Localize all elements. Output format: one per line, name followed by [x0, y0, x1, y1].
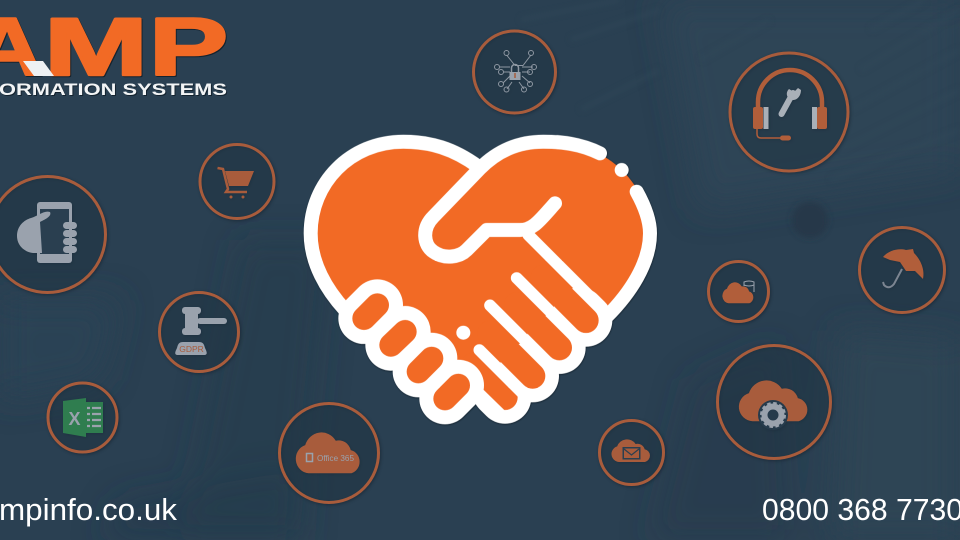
- office logo mark: [306, 454, 312, 462]
- gavel glyph: [175, 307, 227, 355]
- ring: [860, 228, 944, 312]
- circuit lock glyph: [494, 50, 536, 92]
- icon: Office 365 cloud: [280, 404, 378, 502]
- icon: phone in hand: [0, 176, 106, 292]
- logo wordmark AMP: P: [149, 2, 228, 93]
- ring: [708, 262, 768, 322]
- Office 365 label: Office 365: [317, 453, 354, 463]
- icon: cloud with gear: [718, 346, 830, 458]
- ring: [718, 346, 830, 458]
- icon: cloud with envelope: [600, 420, 664, 484]
- heart body: [311, 142, 650, 407]
- website address: mpinfo.co.uk: [0, 492, 177, 527]
- logo wordmark AMP: [0, 2, 228, 93]
- logo wordmark AMP: M: [44, 2, 148, 93]
- wrist edge of lowest finger: [480, 393, 503, 416]
- cart glyph: [218, 168, 254, 198]
- finger separator lines: [479, 235, 602, 394]
- ring: [474, 31, 556, 113]
- cloud bucket glyph: [722, 281, 754, 303]
- ring: [730, 53, 848, 171]
- icon: network security: [474, 31, 556, 113]
- icon: umbrella: [860, 228, 944, 312]
- heart outline left lobe: [311, 142, 478, 310]
- logo tagline: ORMATION SYSTEMS: [0, 81, 227, 99]
- icon: Excel: [48, 383, 117, 452]
- cloud mail glyph: [611, 439, 650, 462]
- icon: shopping cart: [200, 144, 274, 218]
- icon: headset with wrench: [730, 53, 848, 171]
- ring: [48, 383, 117, 452]
- logo white stripe: [23, 61, 54, 76]
- highlight dots: [456, 163, 629, 340]
- icon: small cloud with bucket: [708, 262, 768, 322]
- cloud shape: [296, 432, 360, 473]
- icon: GDPR gavel: [160, 292, 238, 372]
- heart handshake: [311, 142, 650, 416]
- ring: [200, 144, 274, 218]
- right-hand fingers: [473, 278, 586, 397]
- ring: [600, 420, 664, 484]
- left-hand fingers: [364, 305, 458, 399]
- logo: AMP Information Systems: [0, 2, 228, 99]
- umbrella glyph: [883, 249, 924, 287]
- ring: [160, 292, 238, 372]
- headset glyph: [753, 70, 827, 140]
- upper hand outline: [425, 142, 600, 257]
- excel glyph: X: [68, 409, 81, 429]
- heart outline right lobe: [607, 192, 650, 317]
- phone in hand glyph: [17, 202, 77, 263]
- ring: [0, 176, 106, 292]
- GDPR label: GDPR: [179, 344, 204, 354]
- cloud gear glyph: [739, 380, 807, 430]
- ring: [280, 404, 378, 502]
